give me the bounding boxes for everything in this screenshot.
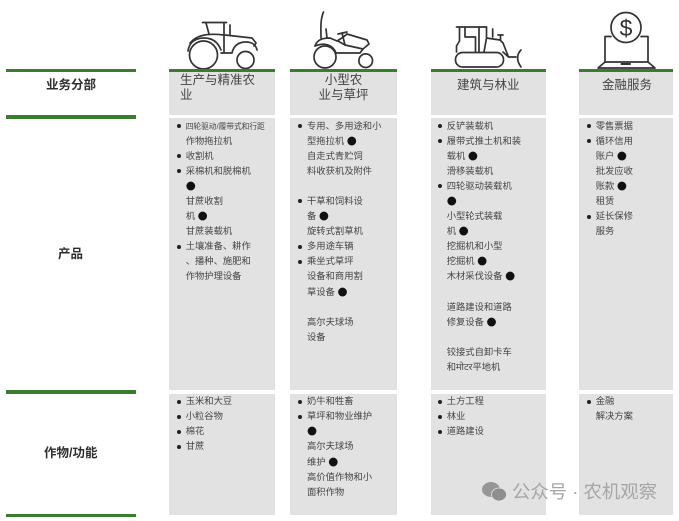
panel: products, construction and forestry: 挖掘机 ●: [447, 253, 487, 267]
segment header: small agriculture and turf: 业与草坪: [318, 88, 368, 102]
panel: products, production and precision agriculture: [169, 118, 275, 390]
watermark: WeChat official account: [482, 481, 657, 502]
panel: products, construction and forestry: 木材采伐设备 ●: [447, 268, 515, 282]
panel: crops, small agriculture and turf: [290, 394, 397, 515]
icon: tractor: [187, 22, 258, 69]
panel: products, construction and forestry: 滑移装载机: [447, 166, 493, 176]
segment header: small agriculture and turf: 小型农: [325, 72, 362, 86]
panel: crops, construction and forestry: 道路建设: [447, 426, 484, 436]
panel: products, small agriculture and turf: 旋转式割草机: [307, 226, 363, 236]
panel: crops, financial services: [579, 394, 673, 515]
panel: crops, small agriculture and turf: 草坪和物业维护: [307, 411, 372, 421]
panel: crops, financial services: 金融: [596, 396, 614, 406]
panel: products, financial services: 账款 ●: [596, 178, 627, 192]
panel: products, construction and forestry: 铰接式自卸卡车: [447, 347, 512, 357]
panel: products, production and precision agriculture: 收割机: [186, 151, 214, 161]
panel: products, financial services: 循环信用: [596, 136, 633, 146]
panel: crops, small agriculture and turf: 高价值作物和小: [307, 472, 372, 482]
panel: products, small agriculture and turf: 多用途车辆: [307, 241, 354, 251]
panel: crops, production and precision agriculture: 小粒谷物: [186, 411, 223, 421]
panel: products, construction and forestry: 机 ●: [447, 223, 469, 237]
panel: crops, small agriculture and turf: ●: [307, 423, 317, 437]
segment header: construction and forestry: 建筑与林业: [457, 78, 520, 92]
row label: crops and functions: 作物/功能: [44, 446, 97, 460]
panel: products, production and precision agriculture: 机 ●: [186, 208, 208, 222]
panel: products, financial services: [579, 118, 673, 390]
panel: products, small agriculture and turf: 草设备 ●: [307, 284, 348, 298]
panel: products, financial services: 延长保修: [596, 211, 633, 221]
segment header: financial services: [579, 68, 673, 115]
segment header: production and precision agriculture: 业: [180, 88, 193, 102]
panel: products, production and precision agriculture: 作物护理设备: [186, 271, 241, 281]
row label: business segments: 业务分部: [46, 78, 96, 92]
panel: products, financial services: 批发应收: [596, 166, 633, 176]
panel: products, production and precision agriculture: 采棉机和脱棉机: [186, 166, 251, 176]
panel: crops, small agriculture and turf: 高尔夫球场: [307, 441, 354, 451]
panel: products, construction and forestry: 载机 ●: [447, 148, 478, 162]
panel: crops, construction and forestry: [431, 394, 546, 515]
panel: products, small agriculture and turf: [290, 118, 397, 390]
segment header: production and precision agriculture: [169, 68, 275, 115]
panel: products, construction and forestry: 小型轮式装载: [447, 211, 502, 221]
panel: crops, small agriculture and turf: 面积作物: [307, 487, 344, 497]
segment header: small agriculture and turf: [290, 68, 397, 115]
panel: products, production and precision agriculture: ●: [186, 178, 196, 192]
panel: crops, construction and forestry: 土方工程: [447, 396, 484, 406]
watermark text: 公众号 · 农机观察: [512, 481, 657, 502]
panel: products, small agriculture and turf: 专用、多用途和小: [307, 120, 381, 130]
panel: products, construction and forestry: 挖掘机和小型: [447, 241, 502, 251]
row label: products: 产品: [58, 247, 83, 261]
row label: business segments: [6, 69, 136, 119]
panel: products, small agriculture and turf: 设备和商用割: [307, 271, 363, 281]
segment header: production and precision agriculture: 生产与精准农: [180, 72, 255, 86]
panel: crops, production and precision agriculture: 甘蔗: [186, 441, 204, 451]
panel: crops, production and precision agriculture: 棉花: [186, 426, 204, 436]
panel: products, small agriculture and turf: 设备: [307, 332, 326, 342]
segment header: financial services: 金融服务: [602, 78, 652, 92]
panel: products, financial services: 账户 ●: [596, 148, 627, 162]
icon: bulldozer: [454, 26, 522, 68]
panel: products, production and precision agriculture: 甘蔗收割: [186, 196, 223, 206]
panel: crops, small agriculture and turf: 维护 ●: [307, 454, 338, 468]
panel: products, small agriculture and turf: 型拖拉机 ●: [307, 133, 357, 147]
segment header: construction and forestry: [431, 68, 546, 115]
panel: products, financial services: 服务: [596, 226, 614, 236]
panel: products, production and precision agriculture: 、播种、施肥和: [186, 256, 251, 266]
panel: products, small agriculture and turf: 乘坐式草坪: [307, 256, 354, 266]
panel: products, construction and forestry: 道路建设和道路: [447, 302, 512, 312]
panel: products, small agriculture and turf: 高尔夫球场: [307, 317, 354, 327]
icon: riding mower: [313, 11, 374, 69]
panel: crops, production and precision agriculture: 玉米和大豆: [186, 396, 232, 406]
panel: products, production and precision agriculture: 土壤准备、耕作: [186, 241, 251, 251]
panel: crops, small agriculture and turf: 奶牛和牲畜: [307, 396, 354, 406]
panel: products, construction and forestry: 四轮驱动装载机: [447, 181, 512, 191]
icon: chat bubbles: [482, 482, 506, 501]
panel: products, production and precision agriculture: 甘蔗装载机: [186, 226, 232, 236]
panel: products, financial services: 租赁: [596, 196, 614, 206]
panel: crops, construction and forestry: 林业: [447, 411, 465, 421]
panel: products, small agriculture and turf: 干草和饲料设: [307, 196, 363, 206]
panel: products, construction and forestry: 修复设备 ●: [447, 314, 497, 328]
icon: laptop with dollar coin: [597, 12, 656, 69]
panel: products, small agriculture and turf: 料收获机及附件: [307, 166, 372, 176]
panel: products, production and precision agriculture: 作物拖拉机: [186, 136, 232, 146]
panel: products, construction and forestry: 履带式推土机和装: [447, 136, 521, 146]
panel: products, construction and forestry: 和मोटर平地机: [447, 362, 500, 372]
panel: products, small agriculture and turf: 备 ●: [307, 208, 329, 222]
panel: products, financial services: 零售票据: [596, 120, 633, 130]
panel: crops, production and precision agriculture: [169, 394, 275, 515]
panel: products, construction and forestry: ●: [447, 193, 457, 207]
panel: products, construction and forestry: 反铲装载机: [447, 120, 493, 130]
panel: products, small agriculture and turf: 自走式青贮饲: [307, 151, 363, 161]
icon: laptop with dollar coin: $: [620, 15, 633, 41]
panel: crops, financial services: 解决方案: [596, 411, 633, 421]
panel: products, production and precision agriculture: 四轮驱动/履带式和行距: [186, 122, 265, 130]
panel: products, construction and forestry: [431, 118, 546, 390]
row label: crops and functions: [6, 390, 136, 517]
